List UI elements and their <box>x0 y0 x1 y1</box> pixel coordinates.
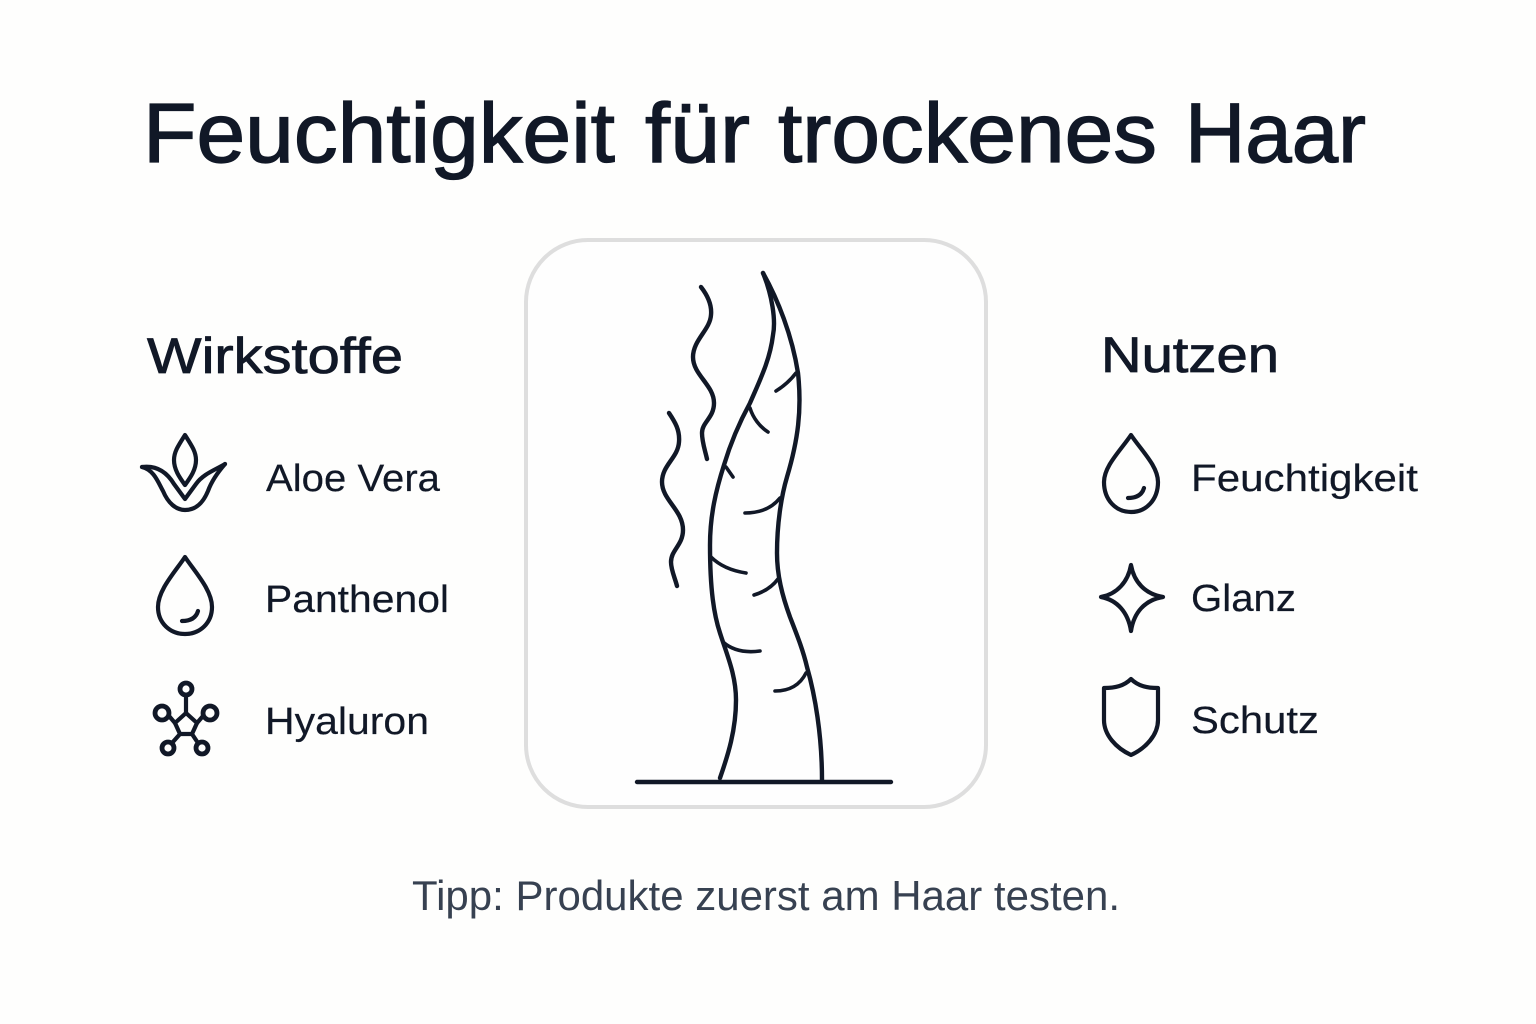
icon: water drop <box>158 557 212 634</box>
icon: aloe vera <box>142 435 225 510</box>
label: Schutz: Schutz <box>1191 700 1319 742</box>
label: Aloe Vera: Aloe Vera <box>266 458 441 500</box>
ground line <box>637 780 891 784</box>
panel: Nutzen <box>1101 327 1418 755</box>
title: Feuchtigkeit <box>143 86 615 180</box>
icon: shine star <box>1101 565 1163 631</box>
panel: Wirkstoffe <box>142 328 449 754</box>
hair strand outline <box>710 273 822 780</box>
heading: Nutzen: Nutzen <box>1101 327 1279 383</box>
icon: shield <box>1104 679 1158 755</box>
title <box>143 86 1366 180</box>
label: Panthenol: Panthenol <box>265 579 449 621</box>
hair damage ticks <box>711 373 806 691</box>
label: Hyaluron: Hyaluron <box>265 701 429 743</box>
moisture wave lines <box>662 287 714 586</box>
title: Haar <box>1185 86 1366 180</box>
label: Glanz: Glanz <box>1191 578 1296 620</box>
label: Feuchtigkeit: Feuchtigkeit <box>1191 458 1418 500</box>
heading: Wirkstoffe: Wirkstoffe <box>147 328 403 384</box>
icon: molecule <box>155 683 217 754</box>
title: für <box>645 86 750 180</box>
title: trockenes <box>778 86 1157 180</box>
icon: moisture drop <box>1104 435 1158 512</box>
panel: hair illustration <box>526 240 986 807</box>
tip text: Tipp: Produkte zuerst am Haar testen. <box>412 872 1120 919</box>
